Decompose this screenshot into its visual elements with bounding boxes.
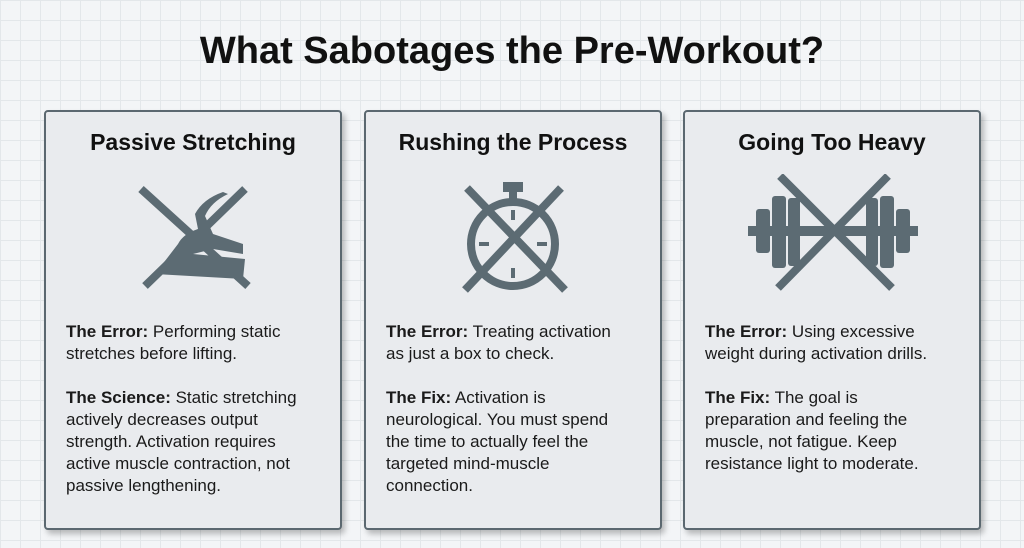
- panel: passive stretching: [44, 110, 342, 530]
- text block: [705, 322, 927, 473]
- icon: crossed-out barbell: [748, 174, 918, 291]
- panel: rushing the process: [364, 110, 662, 530]
- text block: The Error: Treating activation as just a box to check.: [386, 322, 611, 363]
- text block: [386, 322, 611, 495]
- panel: going too heavy: [683, 110, 981, 530]
- text block: [66, 322, 297, 495]
- text block: The Fix: Activation is neurological. You must spend the time to actually feel the targeted mind-muscle connection.: [386, 388, 608, 495]
- text block: The Error: Using excessive weight during activation drills.: [705, 322, 927, 363]
- icon: crossed-out stopwatch: [462, 182, 568, 293]
- text block: The Fix: The goal is preparation and feeling the muscle, not fatigue. Keep resistance light to moderate.: [705, 388, 919, 473]
- text block: The Error: Performing static stretches before lifting.: [66, 322, 280, 363]
- icon: crossed-out stretch: [138, 186, 251, 289]
- text block: The Science: Static stretching actively decreases output strength. Activation requires active muscle contraction, not passive lengthening.: [66, 388, 297, 495]
- heading: Rushing the Process: [399, 129, 627, 155]
- title: What Sabotages the Pre-Workout?: [200, 30, 824, 72]
- heading: Passive Stretching: [90, 129, 296, 155]
- heading: Going Too Heavy: [738, 129, 926, 155]
